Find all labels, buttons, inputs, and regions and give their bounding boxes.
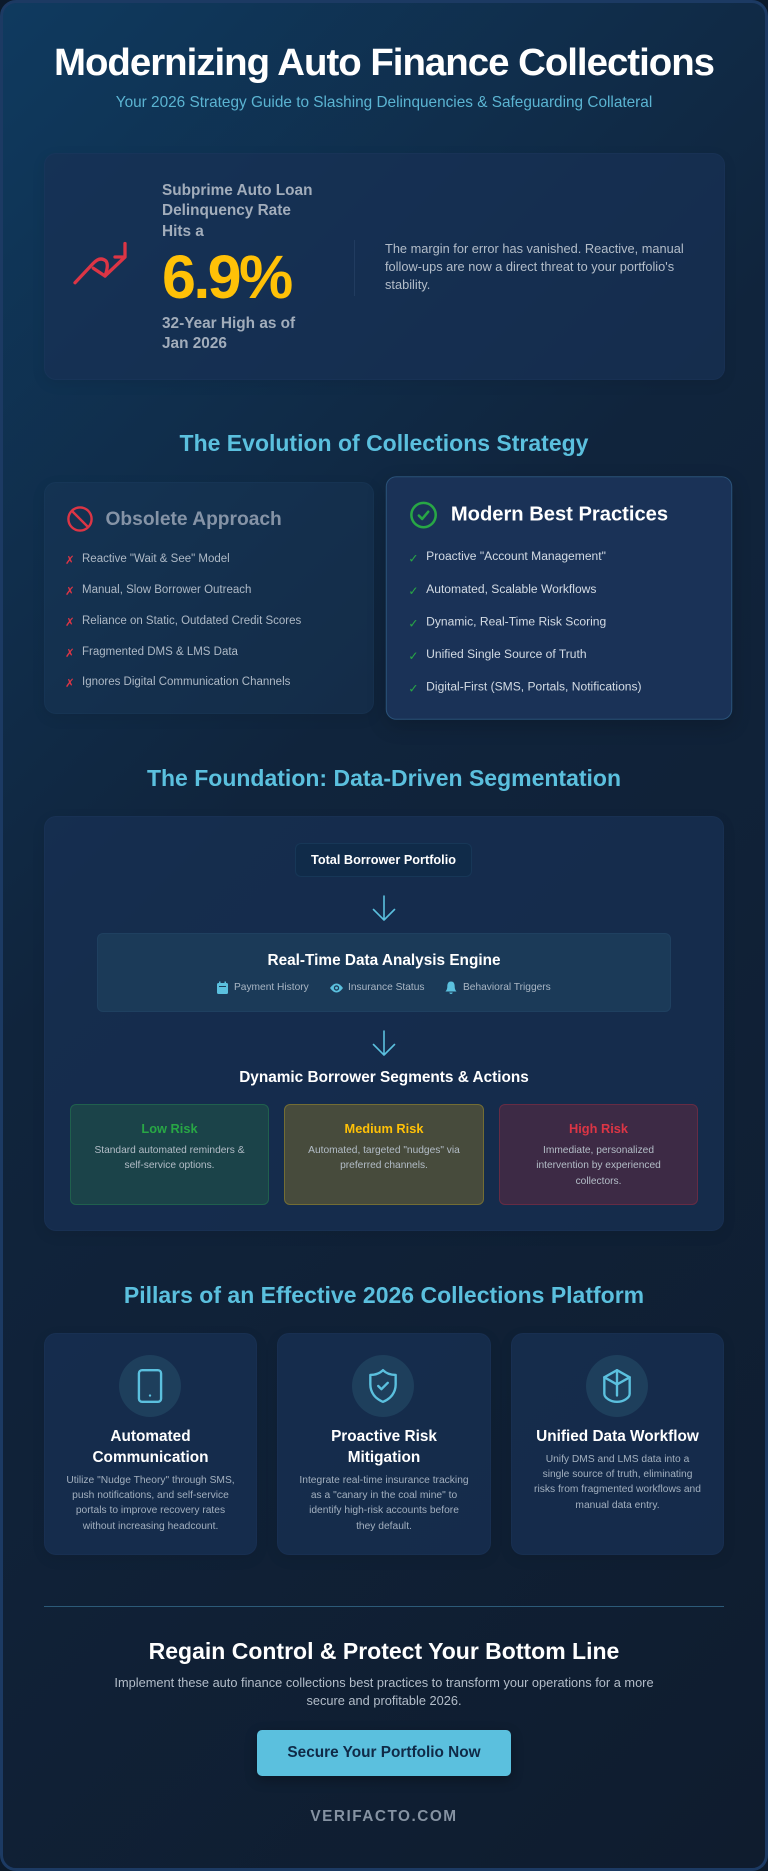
list: obsolete items: ✗ bbox=[65, 646, 75, 660]
list: modern items: Automated, Scalable Workflows bbox=[426, 583, 596, 595]
pillar text: risks from fragmented workflows and bbox=[534, 1484, 701, 1495]
list: modern items: ✓ bbox=[408, 551, 418, 565]
segment: low risk: Low Risk bbox=[141, 1121, 198, 1136]
stat label: Subprime Auto Loan bbox=[162, 182, 312, 198]
segment: high risk: High Risk bbox=[569, 1121, 628, 1136]
pillar text: portals to improve recovery rates bbox=[76, 1505, 225, 1516]
pillar text: as a "canary in the coal mine" to bbox=[311, 1490, 457, 1501]
pillar text: Unify DMS and LMS data into a bbox=[546, 1454, 689, 1464]
stat value: 6.9% bbox=[162, 243, 291, 311]
heading: pillars: Pillars of an Effective 2026 Collections Platform bbox=[124, 1282, 644, 1308]
pillar title bbox=[92, 1428, 209, 1466]
flow node: total portfolio: Total Borrower Portfolio bbox=[311, 853, 456, 867]
pillar title: Proactive Risk bbox=[331, 1428, 437, 1445]
call to action button: Secure Your Portfolio Now bbox=[287, 1744, 481, 1761]
icon: smartphone bbox=[119, 1354, 181, 1416]
list: modern items: ✓ bbox=[408, 583, 418, 598]
list: modern items: Unified Single Source of Truth bbox=[426, 648, 587, 660]
engine title: Real-Time Data Analysis Engine bbox=[267, 952, 501, 969]
pillar: proactive risk mitigation bbox=[277, 1333, 491, 1555]
data point: insurance status: Insurance Status bbox=[348, 982, 424, 993]
brand footer: VERIFACTO.COM bbox=[310, 1808, 458, 1825]
subtitle: Your 2026 Strategy Guide to Slashing Delinquencies & Safeguarding Collateral bbox=[116, 94, 652, 111]
list: modern items: ✓ bbox=[408, 616, 418, 631]
icon: calendar bbox=[217, 982, 228, 994]
closing text bbox=[114, 1675, 654, 1708]
stat commentary: follow-ups are now a direct threat to your portfolio's bbox=[385, 259, 674, 274]
list: obsolete items: ✗ bbox=[65, 584, 75, 598]
heading: evolution: The Evolution of Collections Strategy bbox=[180, 430, 588, 456]
list: obsolete items: Fragmented DMS & LMS Data bbox=[82, 646, 238, 658]
list: obsolete items: ✗ bbox=[65, 553, 75, 567]
pillar title: Unified Data Workflow bbox=[536, 1428, 699, 1445]
panel: modern best practices bbox=[386, 476, 732, 720]
segment: high risk: collectors. bbox=[576, 1176, 621, 1187]
stat commentary: The margin for error has vanished. Reactive, manual bbox=[385, 241, 684, 256]
flow node: data engine bbox=[97, 933, 671, 1012]
pillar text bbox=[534, 1454, 701, 1511]
panel: delinquency statistic bbox=[44, 153, 725, 380]
list: obsolete items: ✗ bbox=[65, 615, 75, 629]
pillar title: Automated bbox=[110, 1428, 191, 1445]
list: modern items: ✓ bbox=[408, 648, 418, 663]
pillar title bbox=[331, 1428, 437, 1466]
stat caption: 32-Year High as of bbox=[162, 314, 295, 332]
stat commentary bbox=[385, 241, 684, 292]
segment: high risk: Immediate, personalized bbox=[543, 1145, 654, 1156]
closing text: secure and profitable 2026. bbox=[306, 1693, 462, 1708]
icon: bell bbox=[446, 982, 456, 994]
list: modern items bbox=[408, 550, 642, 696]
list: modern items: Digital-First (SMS, Portals, Notifications) bbox=[426, 680, 642, 693]
segment: medium risk: Medium Risk bbox=[345, 1121, 423, 1136]
segment: medium risk: preferred channels. bbox=[340, 1160, 428, 1171]
list: obsolete items: Reliance on Static, Outdated Credit Scores bbox=[82, 615, 301, 627]
list: modern items: Dynamic, Real-Time Risk Scoring bbox=[426, 615, 606, 628]
list: obsolete items: ✗ bbox=[65, 676, 75, 690]
pillar text bbox=[299, 1474, 469, 1532]
title: Modernizing Auto Finance Collections bbox=[54, 41, 714, 84]
icon: shield check bbox=[352, 1354, 414, 1416]
list: modern items: Proactive "Account Management" bbox=[426, 550, 606, 563]
icon: data box bbox=[586, 1354, 648, 1416]
pillar text: they default. bbox=[356, 1521, 412, 1532]
closing heading: Regain Control & Protect Your Bottom Line bbox=[149, 1638, 619, 1664]
stat label bbox=[162, 182, 312, 240]
pillar title: Communication bbox=[92, 1449, 209, 1466]
pillar text: identify high-risk accounts before bbox=[309, 1505, 459, 1516]
list: obsolete items bbox=[65, 553, 301, 690]
heading: foundation: The Foundation: Data-Driven Segmentation bbox=[147, 764, 621, 790]
panel: obsolete approach bbox=[44, 482, 374, 714]
pillar text: Utilize "Nudge Theory" through SMS, bbox=[66, 1474, 235, 1486]
stat label: Hits a bbox=[162, 223, 204, 240]
pillar text: manual data entry. bbox=[575, 1500, 660, 1511]
list: obsolete items: Ignores Digital Communication Channels bbox=[82, 676, 290, 688]
pillar: automated communication bbox=[44, 1333, 257, 1555]
pillar text: without increasing headcount. bbox=[83, 1521, 218, 1532]
segments heading: Dynamic Borrower Segments & Actions bbox=[239, 1069, 529, 1086]
icon: erratic red trend line bbox=[73, 242, 127, 284]
pillar text: push notifications, and self-service bbox=[72, 1490, 229, 1501]
icon: check circle bbox=[410, 502, 437, 528]
icon: eye bbox=[330, 984, 343, 992]
icon: prohibited bbox=[67, 506, 93, 532]
list: modern items: ✓ bbox=[408, 681, 418, 696]
pillar title: Mitigation bbox=[348, 1449, 420, 1466]
pillar: unified data workflow bbox=[511, 1333, 724, 1555]
segment: low risk: self-service options. bbox=[124, 1160, 215, 1171]
arrow: down bbox=[372, 895, 396, 921]
arrow: down bbox=[372, 1030, 396, 1056]
segment: medium risk: Automated, targeted "nudges" via bbox=[308, 1145, 460, 1156]
data point: behavioral triggers: Behavioral Triggers bbox=[463, 982, 551, 993]
panel: segmentation flow bbox=[44, 816, 724, 1231]
segment: medium risk bbox=[284, 1104, 484, 1205]
list: obsolete items: Reactive "Wait & See" Model bbox=[82, 553, 230, 565]
call to action button bbox=[257, 1730, 511, 1776]
stat caption: Jan 2026 bbox=[162, 335, 227, 352]
heading: Obsolete Approach bbox=[106, 509, 282, 530]
flow node: total portfolio bbox=[295, 843, 472, 877]
stat commentary: stability. bbox=[385, 277, 430, 292]
pillar text: single source of truth, eliminating bbox=[543, 1469, 692, 1480]
heading: Modern Best Practices bbox=[451, 504, 668, 526]
closing text: Implement these auto finance collections best practices to transform your operations for a more bbox=[114, 1675, 654, 1690]
pillar text: Integrate real-time insurance tracking bbox=[299, 1474, 469, 1486]
data point: payment history: Payment History bbox=[234, 982, 309, 993]
stat caption bbox=[162, 314, 296, 352]
segment: low risk bbox=[70, 1104, 269, 1205]
stat label: Delinquency Rate bbox=[162, 202, 291, 219]
list: obsolete items: Manual, Slow Borrower Outreach bbox=[82, 584, 251, 596]
segment: low risk: Standard automated reminders & bbox=[94, 1145, 245, 1156]
segment: high risk: intervention by experienced bbox=[536, 1160, 661, 1171]
pillar text bbox=[66, 1474, 235, 1532]
segment: high risk bbox=[499, 1104, 698, 1205]
